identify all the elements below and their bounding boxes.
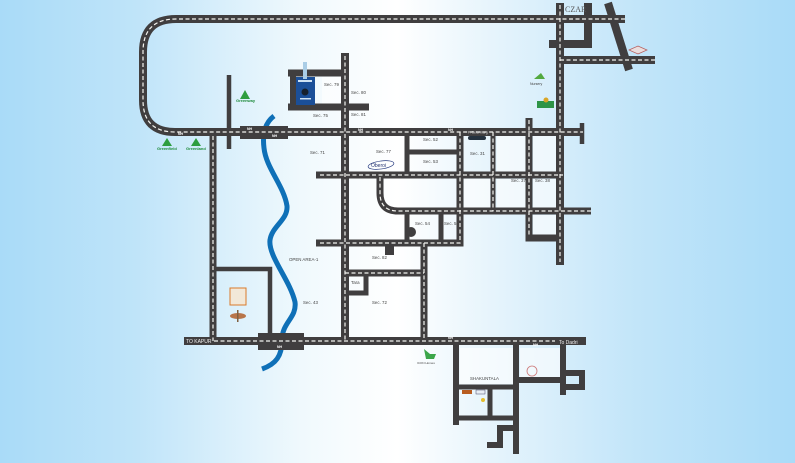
logos	[230, 46, 647, 402]
road number markers: NH	[533, 343, 539, 347]
sector labels: Sec. 79	[324, 82, 339, 87]
road names: CZAR	[565, 5, 587, 14]
road number markers: NH	[272, 134, 278, 138]
sector labels: Sec. 52	[423, 137, 438, 142]
sector labels: Tara	[351, 280, 360, 285]
sector labels: Sec. 71	[310, 150, 325, 155]
road number markers: NH	[448, 336, 454, 340]
logos: ICON Homes	[417, 361, 435, 365]
sector labels: Sec. 81	[351, 112, 366, 117]
landmark labels: Greenfield	[157, 146, 177, 151]
road number markers: NH	[178, 132, 184, 136]
sector blocks	[322, 77, 560, 384]
sector labels: Sec. 72	[372, 300, 387, 305]
sector labels: Sec. 80	[351, 90, 366, 95]
road names: TO KAPUR	[186, 339, 212, 345]
landmark labels: Greenway	[236, 98, 256, 103]
logos: Nursery	[530, 82, 543, 86]
road number markers	[178, 127, 539, 349]
bridges and junction blocks	[240, 126, 416, 350]
sector labels: Sec. 75	[313, 113, 328, 118]
road number markers: NH	[448, 128, 454, 132]
sector labels: Sec. 43	[303, 300, 318, 305]
road centre dashes	[143, 5, 655, 341]
road network	[143, 3, 655, 454]
landmark labels	[157, 98, 256, 151]
river	[262, 116, 295, 369]
road number markers: NH	[358, 128, 364, 132]
sector labels: Sec. 31	[470, 151, 485, 156]
landmark labels: Greenland	[186, 146, 206, 151]
sector labels: SHAKUNTALA	[470, 376, 499, 381]
sector labels	[289, 82, 550, 381]
road names: To Dadri	[559, 340, 578, 346]
road names: F. Sela Marg	[468, 130, 488, 134]
road number markers: NH	[247, 127, 253, 131]
sector labels: Sec. 57	[444, 221, 459, 226]
sector labels: Sec. 77	[376, 149, 391, 154]
icons: tree landmarks	[162, 90, 250, 146]
sector labels: Sec. 38	[535, 178, 550, 183]
sector labels: Sec. 54	[415, 221, 430, 226]
road number markers: NH	[277, 345, 283, 349]
project building	[296, 62, 315, 105]
sector labels: Sec. 37	[511, 178, 526, 183]
sector labels: OPEN AREA-1	[289, 257, 319, 262]
sector labels: Sec. 82	[372, 255, 387, 260]
road names	[186, 5, 587, 346]
logos: Oberoi	[371, 163, 386, 169]
sector labels: Sec. 53	[423, 159, 438, 164]
